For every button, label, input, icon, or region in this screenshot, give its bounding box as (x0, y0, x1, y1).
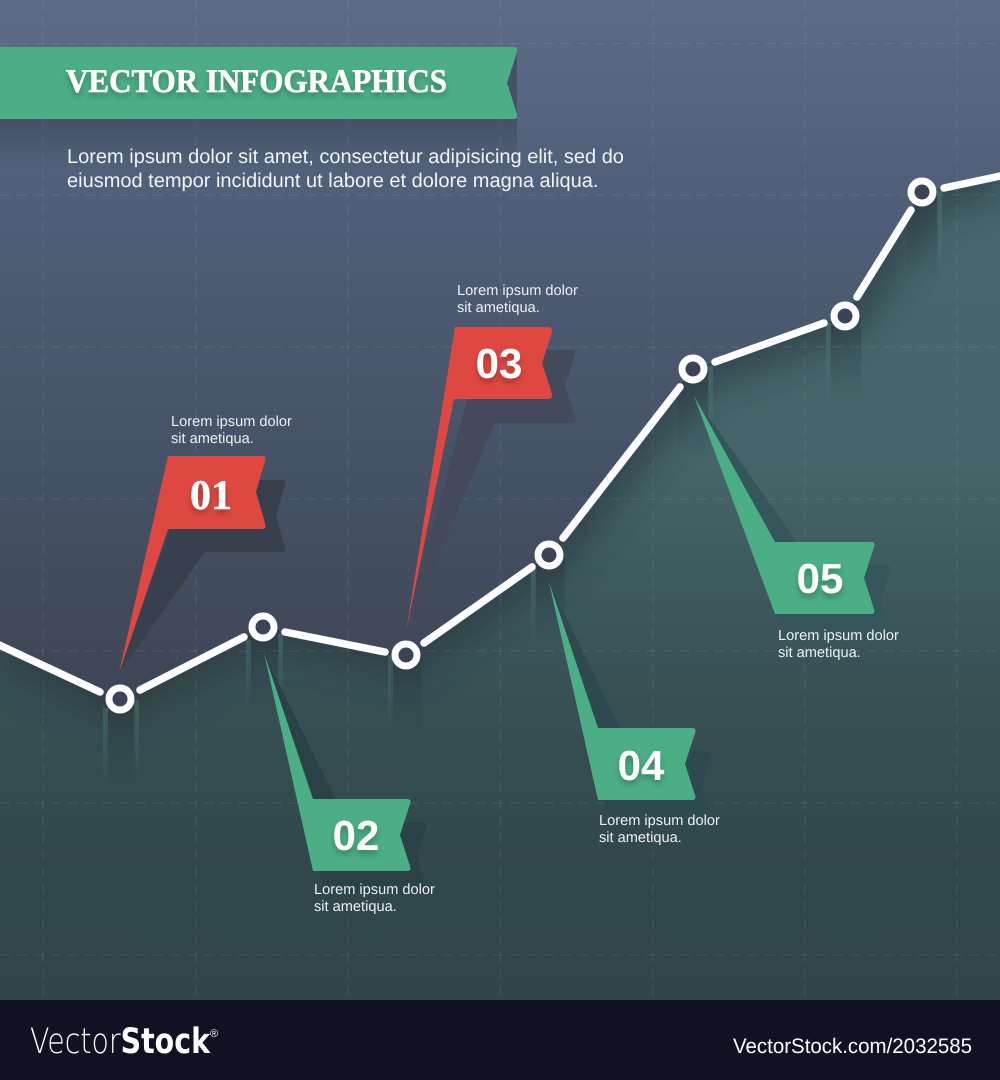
number 04: 04 (618, 742, 665, 789)
title text: VECTOR INFOGRAPHICS (66, 64, 447, 100)
intro text: Lorem ipsum dolor sit amet, consectetur adipisicing elit, sed do (67, 146, 624, 168)
caption 02: Lorem ipsum dolor (314, 882, 435, 898)
footer id: VectorStock.com/2032585 (733, 1035, 972, 1058)
intro text: eiusmod tempor incididunt ut labore et dolore magna aliqua. (67, 170, 598, 192)
caption 03: sit ametiqua. (457, 300, 540, 316)
caption 04: Lorem ipsum dolor (599, 813, 720, 829)
caption 05 (778, 628, 899, 661)
caption 04 (599, 813, 720, 846)
title ribbon (0, 47, 517, 169)
caption 02 (314, 882, 435, 915)
flag 02 (264, 653, 435, 915)
line chart (0, 175, 1000, 710)
number 02: 02 (333, 812, 379, 859)
footer bar (0, 1000, 1000, 1080)
caption 01 (171, 414, 292, 447)
flag 01 (119, 414, 292, 673)
number 05: 05 (797, 555, 843, 602)
caption 02: sit ametiqua. (314, 899, 397, 915)
area under the line chart (0, 176, 1000, 1000)
chart nodes (109, 181, 933, 710)
caption 01: sit ametiqua. (171, 431, 254, 447)
flag 03 (406, 283, 578, 632)
caption 01: Lorem ipsum dolor (171, 414, 292, 430)
caption 05: Lorem ipsum dolor (778, 628, 899, 644)
intro text (67, 146, 624, 192)
footer logo: VectorStock (30, 1022, 211, 1062)
registered mark: ® (210, 1028, 218, 1040)
flag 05 (694, 396, 899, 661)
caption 03 (457, 283, 578, 316)
flag 04 (549, 582, 720, 846)
number 01: 01 (190, 473, 232, 519)
caption 05: sit ametiqua. (778, 645, 861, 661)
caption 04: sit ametiqua. (599, 830, 682, 846)
number 03: 03 (476, 340, 522, 387)
caption 03: Lorem ipsum dolor (457, 283, 578, 299)
